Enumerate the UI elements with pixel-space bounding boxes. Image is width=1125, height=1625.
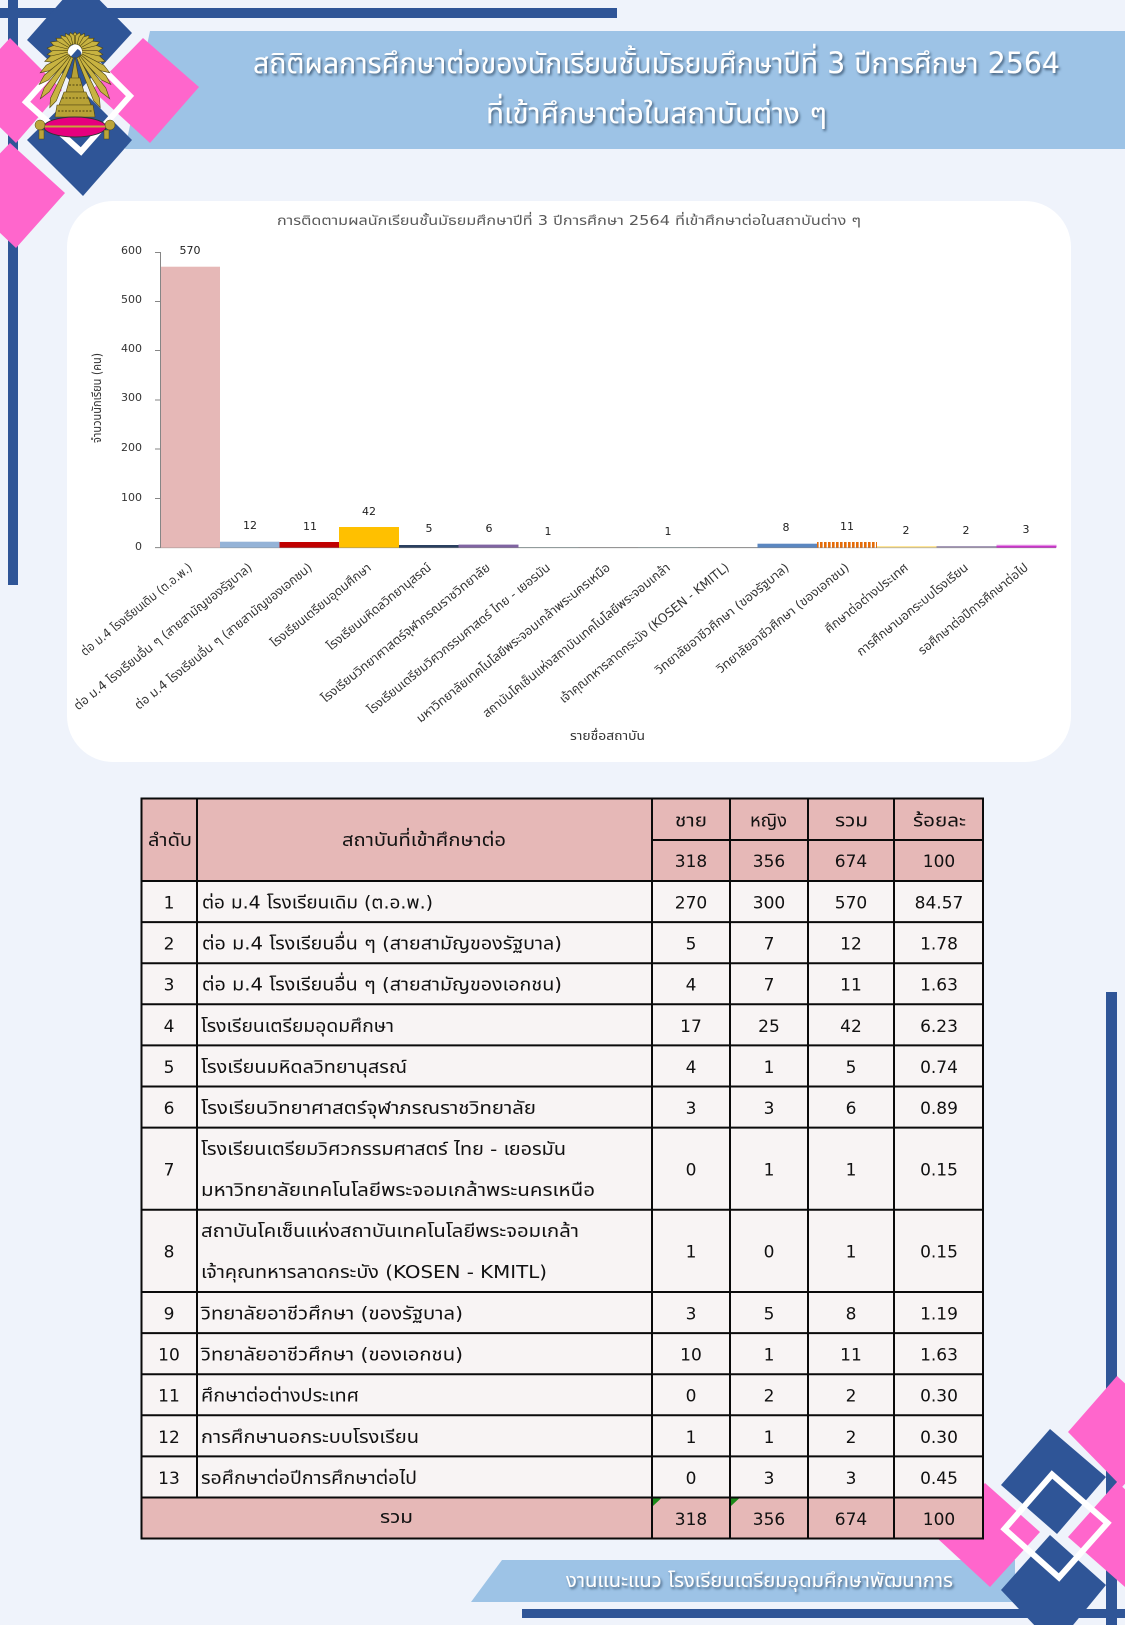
category labels: โรงเรียนมหิดลวิทยานุสรณ์ (323, 560, 434, 653)
row 10: 10 (158, 1346, 180, 1366)
row 5: 4 (686, 1058, 696, 1078)
row 7: โรงเรียนเตรียมวิศวกรรมศาสตร์ ไทย - เยอรมัน (201, 1139, 566, 1160)
bar value labels: 12 (243, 519, 257, 532)
row 12: การศึกษานอกระบบโรงเรียน (201, 1427, 419, 1448)
bar value labels: 8 (782, 521, 790, 534)
row 13: 3 (764, 1469, 774, 1489)
row 8: 0.15 (920, 1242, 958, 1262)
row 10 (158, 1345, 958, 1366)
row 9: 1.19 (920, 1304, 958, 1324)
row 10: 1.63 (920, 1346, 958, 1366)
total row: 100 (923, 1510, 955, 1530)
row 6: โรงเรียนวิทยาศาสตร์จุฬาภรณราชวิทยาลัย (201, 1098, 536, 1119)
row 2: 7 (764, 935, 774, 955)
row 8 (164, 1221, 958, 1283)
row 12: 2 (846, 1428, 856, 1448)
row 12: 1 (764, 1428, 774, 1448)
row 6: 3 (764, 1099, 774, 1119)
row 5: 5 (164, 1058, 174, 1078)
chart title: การติดตามผลนักเรียนชั้นมัธยมศึกษาปีที่ 3 ปีการศึกษา 2564 ที่เข้าศึกษาต่อในสถาบันต่าง ๆ (277, 211, 861, 229)
row 6: 6 (846, 1099, 856, 1119)
table header: 100 (923, 852, 955, 872)
category labels (70, 559, 1031, 726)
row 4: 42 (840, 1017, 862, 1037)
row 13 (158, 1468, 958, 1489)
category labels: ต่อ ม.4 โรงเรียนอื่น ๆ (สายสามัญของรัฐบาล) (70, 559, 255, 713)
row 3: 4 (686, 976, 696, 996)
row 11: 0 (686, 1387, 696, 1407)
y axis ticks: 100 (121, 491, 142, 504)
category labels: การศึกษานอกระบบโรงเรียน (853, 560, 971, 659)
panel: chart (67, 201, 1071, 762)
total row background (142, 1498, 983, 1538)
category labels: รอศึกษาต่อปีการศึกษาต่อไป (915, 560, 1031, 658)
row 11: 2 (846, 1387, 856, 1407)
row 1: 300 (753, 894, 785, 914)
title: สถิติผลการศึกษาต่อของนักเรียนชั้นมัธยมศึกษาปีที่ 3 ปีการศึกษา 2564 (253, 43, 1060, 80)
category labels: ต่อ ม.4 โรงเรียนอื่น ๆ (สายสามัญของเอกชน) (131, 559, 315, 712)
row 9: 5 (764, 1304, 774, 1324)
category labels: โรงเรียนเตรียมอุดมศึกษา (267, 560, 374, 650)
row 4: 6.23 (920, 1017, 958, 1037)
table header (148, 810, 966, 872)
total row: รวม (380, 1507, 413, 1528)
row 12 (158, 1427, 958, 1448)
title (253, 43, 1060, 130)
table header: หญิง (750, 810, 787, 832)
row 4: 17 (680, 1017, 702, 1037)
table header background (142, 798, 983, 881)
row 9: 9 (164, 1304, 174, 1324)
category labels: มหาวิทยาลัยเทคโนโลยีพระจอมเกล้าพระนครเหนือ (413, 560, 613, 726)
total row: 674 (835, 1510, 867, 1530)
total row: 356 (753, 1510, 785, 1530)
row 2 (164, 931, 958, 955)
y axis title: จำนวนนักเรียน (คน) (89, 353, 104, 443)
bar value labels: 570 (180, 244, 200, 257)
top-left diamond decoration (0, 0, 199, 248)
row 6: 3 (686, 1099, 696, 1119)
y axis ticks: 500 (121, 293, 142, 306)
bar value labels: 2 (902, 524, 910, 537)
category labels: วิทยาลัยอาชีวศึกษา (ของรัฐบาล) (651, 560, 792, 678)
row 8: 8 (164, 1242, 174, 1262)
row 9: 3 (686, 1304, 696, 1324)
row 12: 0.30 (920, 1428, 958, 1448)
row 3: ต่อ ม.4 โรงเรียนอื่น ๆ (สายสามัญของเอกชน) (202, 972, 562, 996)
total row: 318 (675, 1510, 707, 1530)
category labels: โรงเรียนเตรียมวิศวกรรมศาสตร์ ไทย - เยอรมัน (364, 560, 553, 717)
header band (125, 31, 1125, 149)
row 1: 270 (675, 894, 707, 914)
table header: ชาย (675, 810, 707, 832)
x axis title: รายชื่อสถาบัน (570, 727, 645, 743)
row 6: 0.89 (920, 1099, 958, 1119)
row 13: 0.45 (920, 1469, 958, 1489)
row 13: 0 (686, 1469, 696, 1489)
bottom-right diamond decoration (937, 1376, 1125, 1625)
footer band (471, 1560, 1015, 1602)
row 2: ต่อ ม.4 โรงเรียนอื่น ๆ (สายสามัญของรัฐบาล) (202, 931, 562, 955)
bar value labels: 3 (1022, 523, 1030, 536)
row 2: 2 (164, 935, 174, 955)
row 8: 1 (846, 1242, 856, 1262)
bar chart (161, 267, 1056, 548)
row 11: 11 (158, 1387, 180, 1407)
row 2: 12 (840, 935, 862, 955)
bar value labels: 6 (486, 522, 492, 535)
row 5: โรงเรียนมหิดลวิทยานุสรณ์ (201, 1057, 407, 1078)
bar value labels: 5 (426, 522, 432, 535)
row 7: 1 (846, 1160, 856, 1180)
bar value labels (180, 244, 1030, 538)
row 6 (164, 1098, 958, 1119)
table (142, 798, 983, 1538)
row 10: วิทยาลัยอาชีวศึกษา (ของเอกชน) (200, 1345, 463, 1366)
row 13: รอศึกษาต่อปีการศึกษาต่อไป (201, 1468, 417, 1489)
row 1: 570 (835, 894, 867, 914)
row 12: 12 (158, 1428, 180, 1448)
table header: สถาบันที่เข้าศึกษาต่อ (342, 827, 506, 851)
row 2: 5 (686, 935, 696, 955)
row 5 (164, 1057, 958, 1078)
category labels: ต่อ ม.4 โรงเรียนเดิม (ต.อ.พ.) (77, 560, 195, 659)
y axis ticks: 0 (135, 540, 142, 553)
row 4: 4 (164, 1017, 174, 1037)
row 11 (158, 1386, 958, 1407)
row 7: 0.15 (920, 1160, 958, 1180)
row 1 (164, 892, 963, 914)
row 3: 11 (840, 976, 862, 996)
row 5: 1 (764, 1058, 774, 1078)
row 4: โรงเรียนเตรียมอุดมศึกษา (201, 1016, 394, 1037)
total row (380, 1498, 955, 1530)
y axis ticks: 200 (121, 441, 142, 454)
bar value labels: 42 (362, 505, 376, 518)
row 8: 0 (764, 1242, 774, 1262)
row 8: สถาบันโคเซ็นแห่งสถาบันเทคโนโลยีพระจอมเกล้า (201, 1221, 579, 1242)
row 13: 3 (846, 1469, 856, 1489)
category labels: สถาบันโคเซ็นแห่งสถาบันเทคโนโลยีพระจอมเกล้า (479, 560, 673, 720)
y axis ticks: 300 (121, 391, 142, 404)
bar value labels: 11 (840, 520, 854, 533)
row 10: 1 (764, 1346, 774, 1366)
icon: school emblem (35, 32, 115, 139)
bar value labels: 1 (544, 525, 552, 538)
row 1: 84.57 (915, 894, 963, 914)
table header: 318 (675, 852, 707, 872)
row 5: 5 (846, 1058, 856, 1078)
row 3: 1.63 (920, 976, 958, 996)
footer frame bar (522, 1609, 1125, 1618)
row 7: 0 (686, 1160, 696, 1180)
row 7 (164, 1139, 958, 1201)
row 13: 13 (158, 1469, 180, 1489)
row 8: 1 (686, 1242, 696, 1262)
row 11: ศึกษาต่อต่างประเทศ (201, 1386, 359, 1407)
bar value labels: 1 (664, 525, 672, 538)
row 9 (164, 1304, 958, 1324)
y axis ticks (121, 244, 1056, 553)
row 11: 0.30 (920, 1387, 958, 1407)
y axis ticks: 600 (121, 244, 142, 257)
row 2: 1.78 (920, 935, 958, 955)
category labels: โรงเรียนวิทยาศาสตร์จุฬาภรณราชวิทยาลัย (318, 560, 493, 705)
row 5: 0.74 (920, 1058, 958, 1078)
row 3: 7 (764, 976, 774, 996)
bar value labels: 2 (962, 524, 970, 537)
row 10: 11 (840, 1346, 862, 1366)
row 11: 2 (764, 1387, 774, 1407)
row 9: 8 (846, 1304, 856, 1324)
top and left frame bars (0, 0, 617, 585)
row 9: วิทยาลัยอาชีวศึกษา (ของรัฐบาล) (200, 1304, 463, 1324)
table header: 356 (753, 852, 785, 872)
table header: รวม (835, 810, 868, 832)
row 1: ต่อ ม.4 โรงเรียนเดิม (ต.อ.พ.) (202, 892, 433, 914)
bar value labels: 11 (303, 520, 317, 533)
row 7: 1 (764, 1160, 774, 1180)
category labels: เจ้าคุณทหารลาดกระบัง (KOSEN - KMITL) (556, 560, 732, 706)
row 10: 10 (680, 1346, 702, 1366)
title: ที่เข้าศึกษาต่อในสถาบันต่าง ๆ (486, 93, 827, 130)
row 7: 7 (164, 1160, 174, 1180)
row 8: เจ้าคุณทหารลาดกระบัง (KOSEN - KMITL) (201, 1262, 547, 1283)
footer text: งานแนะแนว โรงเรียนเตรียมอุดมศึกษาพัฒนาการ (566, 1568, 953, 1592)
row 1: 1 (164, 894, 174, 914)
table header: 674 (835, 852, 867, 872)
y axis ticks: 400 (121, 342, 142, 355)
row 7: มหาวิทยาลัยเทคโนโลยีพระจอมเกล้าพระนครเหนือ (201, 1180, 595, 1201)
category labels: ศึกษาต่อต่างประเทศ (821, 560, 911, 636)
row 3: 3 (164, 976, 174, 996)
table header: ลำดับ (148, 830, 192, 851)
right frame bar (1106, 992, 1117, 1625)
row 4: 25 (758, 1017, 780, 1037)
row 3 (164, 972, 958, 996)
table header: ร้อยละ (913, 810, 966, 832)
row 12: 1 (686, 1428, 696, 1448)
category labels: วิทยาลัยอาชีวศึกษา (ของเอกชน) (713, 560, 852, 676)
row 4 (164, 1016, 958, 1037)
row 6: 6 (164, 1099, 174, 1119)
